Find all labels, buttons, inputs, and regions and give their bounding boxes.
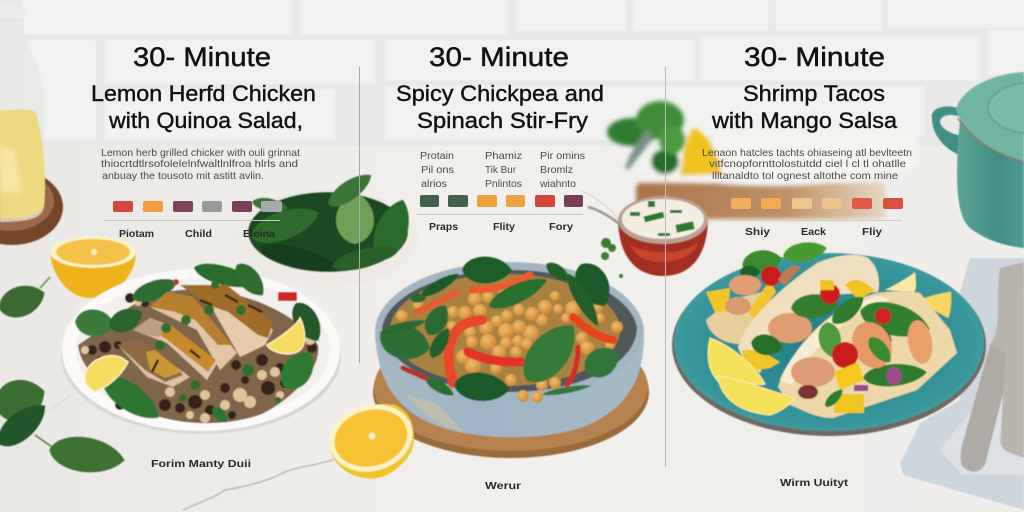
blurred background herbs, mango and wood tray [607, 101, 917, 219]
caption: Wirm Uuityt [780, 477, 849, 489]
quinoa bed [78, 289, 318, 423]
heading: recipe name [91, 81, 316, 133]
nutrition text columns [420, 150, 585, 190]
lemon on taco plate back [885, 272, 916, 292]
front taco tortilla [778, 291, 957, 418]
swatch labels: Piotam [119, 228, 154, 240]
swatch labels: Shiy [745, 226, 770, 238]
caption: Forim Manty Duii [151, 458, 251, 470]
wood board and blue bowl with chickpeas [373, 256, 649, 458]
nutrition text columns: Phamiz [485, 150, 522, 162]
chicken slices [193, 287, 273, 357]
peas [396, 287, 623, 403]
divider lines [359, 67, 666, 467]
heading: 30-minute: 30- Minute [744, 42, 885, 72]
panel: lemon herb chicken [91, 42, 316, 470]
spinach on plate [192, 259, 258, 293]
heading: recipe name: with Quinoa Salad, [108, 108, 303, 133]
heading: 30-minute: 30- Minute [133, 42, 271, 72]
heading: recipe name: Spinach Stir-Fry [417, 108, 588, 133]
lemon half, center [322, 395, 420, 481]
description text: Lemon herb grilled chicker with ouli grinnat [101, 147, 300, 159]
swatch labels [429, 221, 573, 233]
description text [101, 147, 300, 182]
colour swatches [113, 201, 282, 212]
heading: recipe name: Shrimp Tacos [743, 81, 885, 106]
chickpea pile [390, 274, 620, 386]
lemon wedges on taco plate [708, 338, 765, 385]
nutrition text columns: Pnlintos [485, 178, 522, 190]
nutrition text columns: alrios [421, 178, 447, 190]
napkin and cutlery [900, 258, 1024, 510]
spinach leaves scattered left [0, 277, 127, 477]
swatch labels [745, 226, 882, 238]
swatch labels: Fliy [862, 226, 882, 238]
swatch labels: Flity [493, 221, 515, 233]
swatch labels: Eloina [243, 228, 275, 240]
heading: recipe name [711, 81, 898, 133]
teal pot [932, 72, 1024, 248]
description text: llltanaldto tol ognest altothe com mine [712, 170, 898, 182]
taco filling back [706, 239, 828, 344]
bell pepper strips [403, 275, 613, 385]
nutrition text columns: Pil ons [421, 164, 454, 176]
description text: thiocrtdtlrsofolelelnfwaltlnlfroa hlrls and [101, 158, 298, 170]
back tortilla [738, 255, 879, 373]
colour swatches [731, 198, 903, 209]
description text: vitfcnopfornttolostutdd ciel l cl tl ohatlle [709, 158, 906, 170]
colour swatches [420, 195, 583, 207]
heading: 30-minute: 30- Minute [429, 42, 569, 72]
description text: anbuay the tousoto mit astitt avlin. [102, 170, 264, 182]
nutrition text columns: Pir omins [540, 150, 585, 162]
heading: recipe name [396, 81, 604, 133]
front taco filling [791, 291, 936, 413]
heading: recipe name: Spicy Chickpea and [396, 81, 604, 106]
swatch labels: Fory [549, 221, 573, 233]
swatch labels [119, 228, 275, 240]
heading: recipe name: Lemon Herfd Chicken [91, 81, 316, 106]
heading: recipe name: with Mango Salsa [711, 108, 898, 133]
caption: Werur [485, 480, 521, 492]
bowl spinach [375, 256, 626, 404]
back taco filling front side [749, 280, 875, 358]
spinach bowl behind chicken plate [238, 167, 418, 287]
panel: spicy chickpea [396, 42, 604, 492]
swatch labels: Eack [801, 226, 826, 238]
nutrition text columns: Protain [420, 150, 454, 162]
swatch labels: Praps [429, 221, 458, 233]
nutrition text columns: Tik Bur [485, 164, 516, 176]
lemon half, top left [50, 236, 136, 298]
description text: Lenaon hatcles tachts ohiaseing atl bevlteetn [702, 147, 912, 159]
panel: shrimp tacos [702, 42, 912, 489]
salsa cup with spoon and herbs [588, 196, 708, 278]
swatch labels: Child [185, 228, 212, 240]
nutrition text columns: wiahnto [539, 178, 576, 190]
chicken quinoa salad plate [61, 258, 341, 434]
nutrition text columns: Bromlz [540, 164, 573, 176]
lemon wedges on plate [85, 356, 128, 392]
bottle of dressing on wooden dish [0, 6, 63, 245]
description text [702, 147, 912, 182]
teal taco plate [672, 239, 986, 436]
